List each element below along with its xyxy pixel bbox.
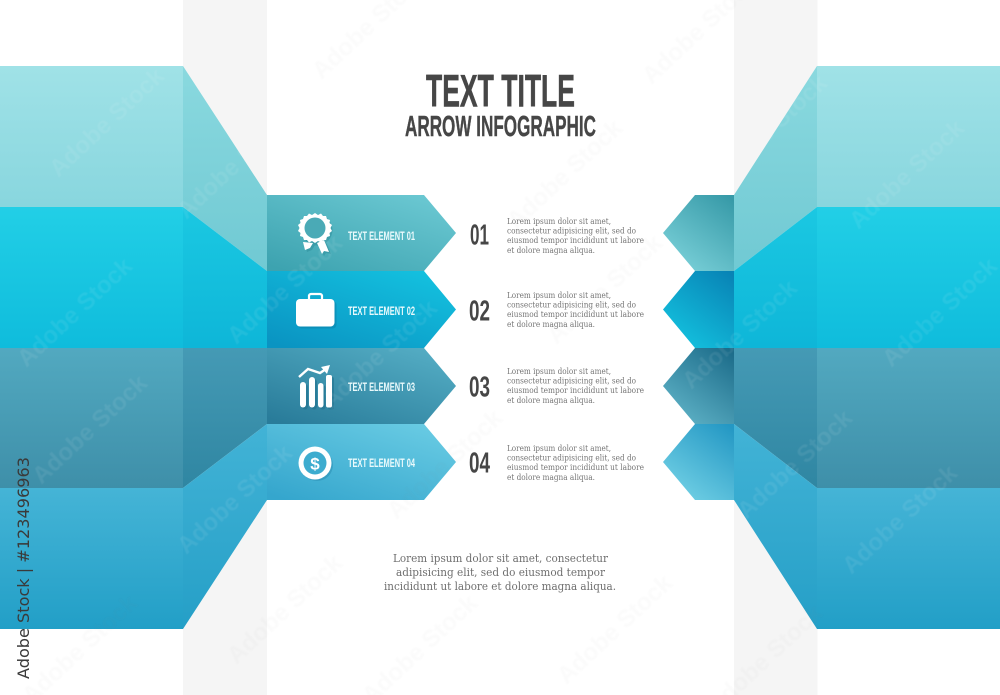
right arrow 2	[663, 271, 734, 348]
label 4: TEXT ELEMENT 04	[348, 456, 415, 470]
watermarks: Adobe Stock	[837, 459, 963, 579]
text block 3: eiusmod tempor incididunt ut labore	[507, 385, 644, 395]
text block 1: Lorem ipsum dolor sit amet,	[507, 216, 611, 226]
text block 2: Lorem ipsum dolor sit amet,	[507, 290, 611, 300]
icon: dollar coin: $	[310, 454, 320, 474]
label 1: TEXT ELEMENT 01	[348, 229, 415, 243]
text block 4	[507, 443, 644, 482]
footer text: adipisicing elit, sed do eiusmod tempor	[396, 566, 606, 579]
text block 3	[507, 366, 644, 405]
icon: briefcase	[296, 294, 336, 328]
right ribbon panels	[734, 66, 1000, 629]
watermarks: Adobe Stock	[542, 229, 668, 349]
text block 1	[507, 216, 644, 255]
text block 2: consectetur adipisicing elit, sed do	[507, 300, 636, 310]
watermarks: Adobe Stock	[317, 294, 443, 414]
text block 4: consectetur adipisicing elit, sed do	[507, 453, 636, 463]
text block 3: et dolore magna aliqua.	[507, 395, 595, 405]
arrow 1	[267, 195, 456, 271]
watermarks: Adobe Stock	[222, 549, 348, 669]
watermarks: Adobe Stock	[677, 274, 803, 394]
watermarks: Adobe Stock	[172, 439, 298, 559]
text block 3: Lorem ipsum dolor sit amet,	[507, 366, 611, 376]
text block 4: eiusmod tempor incididunt ut labore	[507, 462, 644, 472]
watermarks: Adobe Stock	[382, 404, 508, 524]
arrow 3	[267, 348, 456, 424]
right arrow 1	[663, 195, 734, 271]
icon: award ribbon	[298, 213, 332, 256]
text block 2: et dolore magna aliqua.	[507, 319, 595, 329]
watermarks: Adobe Stock	[552, 569, 678, 689]
watermarks: Adobe Stock	[27, 369, 153, 489]
number 01: 01	[470, 220, 489, 252]
icon: dollar coin	[298, 446, 333, 481]
watermarks: Adobe Stock	[877, 252, 1000, 372]
text block 1: eiusmod tempor incididunt ut labore	[507, 235, 644, 245]
footer text	[384, 552, 616, 593]
right grey band	[734, 0, 818, 695]
right arrow 4	[663, 424, 734, 500]
watermarks: Adobe Stock	[844, 114, 970, 234]
number 04: 04	[469, 448, 490, 480]
text block 4: et dolore magna aliqua.	[507, 472, 595, 482]
text block 4: Lorem ipsum dolor sit amet,	[507, 443, 611, 453]
label 2: TEXT ELEMENT 02	[348, 304, 415, 318]
watermarks: Adobe Stock	[44, 62, 170, 182]
text block 1: et dolore magna aliqua.	[507, 245, 595, 255]
watermarks: Adobe Stock	[502, 114, 628, 234]
right arrow 3	[663, 348, 734, 424]
title: TEXT TITLE	[426, 66, 575, 116]
watermarks: Adobe Stock	[707, 69, 833, 189]
text block 3: consectetur adipisicing elit, sed do	[507, 376, 636, 386]
number 03: 03	[469, 372, 490, 404]
arrow 4	[267, 424, 456, 500]
label 3: TEXT ELEMENT 03	[348, 380, 415, 394]
number 02: 02	[469, 296, 490, 328]
watermarks: Adobe Stock	[732, 404, 858, 524]
footer text: incididunt ut labore et dolore magna aliqua.	[384, 580, 616, 593]
watermarks: Adobe Stock	[222, 229, 348, 349]
text block 2: eiusmod tempor incididunt ut labore	[507, 309, 644, 319]
watermarks: Adobe Stock	[12, 252, 138, 372]
left grey band	[183, 0, 267, 695]
footer text: Lorem ipsum dolor sit amet, consectetur	[393, 552, 609, 565]
watermarks: Adobe Stock	[172, 104, 298, 224]
text block 1: consectetur adipisicing elit, sed do	[507, 226, 636, 236]
icon: bar chart with arrow	[299, 365, 334, 410]
stock id side text: Adobe Stock | #123496963	[14, 457, 33, 679]
text block 2	[507, 290, 644, 329]
arrow 2	[267, 271, 456, 348]
left ribbon panels	[0, 66, 267, 629]
subtitle: ARROW INFOGRAPHIC	[405, 111, 596, 143]
